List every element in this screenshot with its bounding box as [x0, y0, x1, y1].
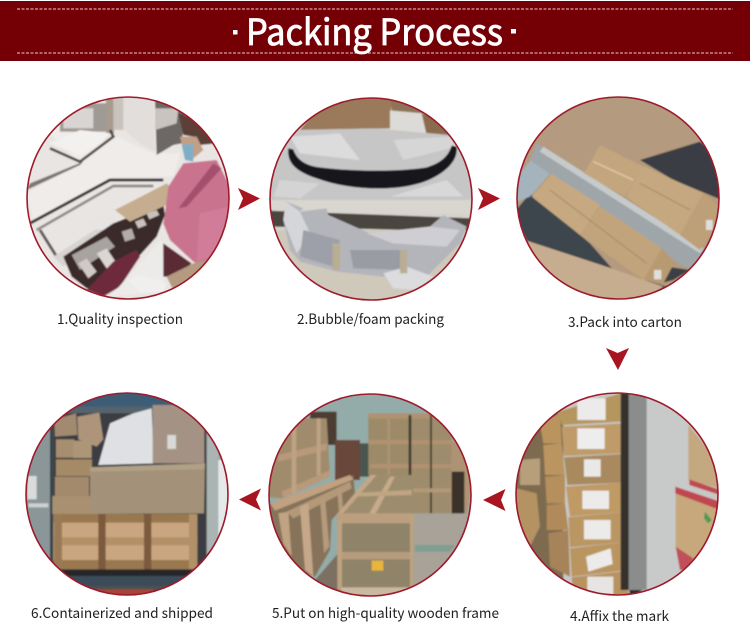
step 2: bubble and foam packing: [267, 93, 477, 329]
label: 5.Put on high-quality wooden frame: [272, 603, 499, 623]
title: Packing Process: [246, 4, 503, 56]
photo: wooden crates in a warehouse: [270, 394, 470, 596]
arrow: step 3 to 4: [606, 348, 629, 370]
arrow: step 5 to 6: [239, 488, 261, 510]
header banner: [0, 1, 750, 61]
photo: worker inspecting a chrome part: [28, 98, 228, 298]
label: 6.Containerized and shipped: [31, 603, 213, 623]
label: 3.Pack into carton: [568, 312, 682, 332]
circle border: [270, 98, 472, 300]
circle border: [27, 97, 229, 299]
circle border: [26, 393, 228, 595]
photo: cardboard boxes in a carton: [513, 93, 723, 303]
step 5: wooden frame: [263, 390, 499, 623]
circle border: [517, 97, 719, 299]
label: 2.Bubble/foam packing: [297, 309, 444, 329]
photo: loaded shipping container: [26, 394, 228, 594]
label: 4.Affix the mark: [570, 606, 669, 626]
photo: labelled boxes stacked by a wall: [510, 390, 720, 600]
arrow: step 2 to 3: [478, 188, 500, 210]
step 3: pack into carton: [513, 93, 723, 332]
step 6: containerized and shipped: [20, 390, 233, 623]
photo: bumper lip on plastic and wrapped in foam: [267, 93, 477, 303]
circle border: [269, 394, 471, 596]
arrow: step 1 to 2: [238, 188, 260, 210]
circle border: [516, 393, 718, 595]
arrow: step 4 to 5: [483, 489, 506, 511]
label: 1.Quality inspection: [57, 309, 183, 329]
step 4: affix the mark: [510, 390, 720, 626]
step 1: quality inspection: [20, 90, 237, 329]
